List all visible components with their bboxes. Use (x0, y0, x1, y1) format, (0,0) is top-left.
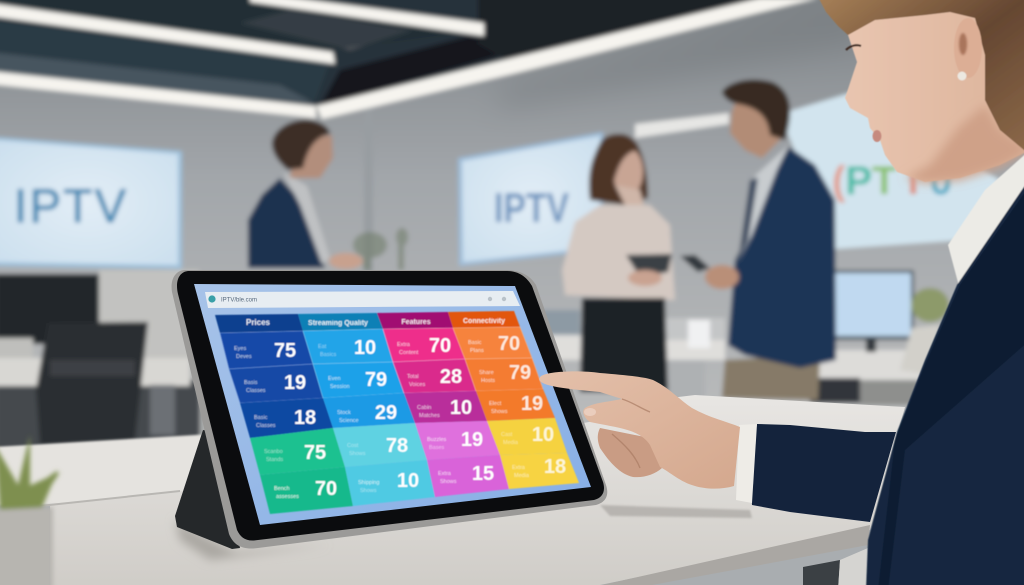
wall shadow below the strip (500, 5, 860, 110)
cell: streaming 10: Eat (318, 344, 327, 350)
cell: connectivity 19: Shows (491, 409, 508, 415)
cell: connectivity 79: Share (479, 370, 494, 376)
cell: features 10: Cabin (417, 405, 431, 411)
cell: yellow 10: Cast (501, 432, 513, 438)
cell: yellow 18 (500, 453, 579, 489)
cell: green 75 (250, 428, 345, 475)
blurred office background (0, 0, 1024, 460)
cell: price 75 (220, 331, 313, 369)
person: man right (705, 80, 836, 400)
cell: price 75: Deves (236, 354, 252, 360)
cell: green 70 (260, 467, 353, 514)
tablet stand (175, 430, 240, 549)
fingernail (584, 408, 596, 416)
cell: cyan 10: Shows (360, 488, 377, 494)
inner ear (959, 33, 967, 55)
cell: price 18 (240, 398, 333, 438)
wall screen left: IPTV (14, 179, 127, 232)
shirt cuff (736, 424, 757, 503)
ceiling light strips (0, 0, 818, 138)
tablet with comparison table (172, 270, 607, 549)
cell: connectivity 79 (465, 358, 543, 391)
wall screen left (0, 137, 182, 269)
cell: green 70: 70 (315, 478, 337, 500)
pot (0, 507, 53, 585)
wall screen centre: IPTV (494, 184, 569, 231)
cell: features 70 (383, 328, 465, 362)
hand (539, 371, 740, 489)
cell: streaming 10: Basics (320, 352, 336, 358)
cell: yellow 10 (487, 418, 567, 455)
cell: green 75: Scanbo (264, 449, 283, 455)
cell: connectivity 79: Hosts (481, 378, 495, 384)
cell: green 75: 75 (304, 442, 326, 464)
cell: streaming 79: 79 (365, 369, 387, 391)
cell: yellow 18: 18 (544, 456, 566, 478)
cell: violet 15 (427, 455, 509, 497)
cell: cyan 78: 78 (386, 435, 408, 457)
cell: connectivity 19 (476, 389, 555, 421)
wall corner (364, 105, 373, 435)
cell: violet 19: Buzzles (427, 437, 447, 443)
cell: connectivity 70 (453, 327, 532, 359)
address bar (205, 291, 520, 308)
cell: features 10: 10 (450, 397, 472, 419)
cell: streaming 79 (313, 362, 404, 398)
cell: yellow 18: Extra (512, 465, 526, 471)
neck shadow (905, 105, 1024, 183)
column header: Prices (215, 314, 303, 333)
finger shading (612, 399, 650, 468)
crease between tables (40, 490, 180, 507)
left desk (0, 338, 190, 435)
cell: cyan 78 (333, 423, 427, 467)
back room lower area (99, 270, 199, 360)
cell: streaming 29: 29 (375, 402, 397, 424)
presenter woman foreground (817, 0, 1024, 585)
cell: green 70: assesses (276, 494, 299, 500)
cell: connectivity 70: Plans (470, 348, 484, 354)
lips (872, 130, 882, 142)
cell: streaming 29: Science (339, 418, 359, 424)
cell: connectivity 70: 70 (498, 333, 520, 355)
curled fingers (598, 428, 662, 477)
right back monitor (827, 270, 914, 352)
tablet screen (194, 284, 591, 525)
cell: cyan 10: Shipping (358, 480, 379, 486)
plant and pot (0, 435, 60, 585)
comparison grid (215, 311, 579, 514)
cell: features 28: 28 (440, 366, 462, 388)
column header: Connectivity (448, 311, 520, 328)
eye (846, 45, 861, 50)
back table surface (0, 432, 250, 505)
face and neck (835, 0, 1024, 182)
table front edge (602, 525, 870, 585)
cell: violet 15: Shows (440, 479, 457, 485)
navy sleeve (750, 424, 896, 522)
office chair (36, 322, 148, 445)
cell: violet 19 (415, 421, 500, 460)
plant on back wall (353, 228, 408, 270)
cell: price 75: Eyes (234, 346, 246, 352)
cell: price 18: 18 (294, 407, 316, 429)
cell: streaming 29 (323, 393, 415, 428)
white collar (948, 150, 1024, 290)
cell: streaming 10: 10 (354, 337, 376, 359)
cell: price 18: Classes (256, 423, 276, 429)
cell: features 10: Matches (419, 413, 440, 419)
wall screen right (780, 93, 1000, 249)
cell: yellow 10: 10 (532, 424, 554, 446)
cell: connectivity 19: Elect (489, 401, 502, 407)
cell: price 75: 75 (274, 340, 296, 362)
cell: cyan 10: 10 (397, 470, 419, 492)
cell: features 28 (393, 359, 476, 393)
cell: features 70: Extra (397, 342, 411, 348)
cell: violet 15: 15 (472, 463, 494, 485)
hair (817, 0, 1024, 155)
address bar: IPTV/ble.com (221, 298, 257, 304)
cell: green 75: Stands (266, 457, 283, 463)
cell: violet 15: Extra (438, 471, 452, 477)
cell: cyan 78: Cost (347, 443, 359, 449)
cell: cyan 10 (345, 460, 435, 506)
column header: Features (377, 312, 453, 329)
pointing hand and sleeve (539, 371, 896, 522)
cell: features 70: Content (399, 350, 419, 356)
cell: price 19: Classes (246, 388, 266, 394)
table leg (803, 560, 840, 585)
cell: price 19: 19 (284, 372, 306, 394)
column header: Features: Features (401, 319, 431, 326)
cell: green 70: Bench (274, 486, 290, 492)
back wall (0, 0, 1024, 460)
cell: violet 19: Bases (429, 445, 445, 451)
cell: connectivity 70: Basic (468, 340, 482, 346)
cell: cyan 78: Shows (349, 451, 366, 457)
cell: violet 19: 19 (461, 429, 483, 451)
navy jacket (866, 178, 1024, 585)
plant leaves (0, 435, 60, 515)
column header: Streaming Quality: Streaming Quality (308, 320, 368, 327)
foreground table (40, 395, 905, 585)
cell: features 28: Total (407, 374, 419, 380)
cell: streaming 79: Session (330, 384, 350, 390)
wall screen right: (PT I 0 (832, 159, 952, 203)
column header: Streaming Quality (298, 313, 383, 331)
ear (954, 18, 982, 78)
cell: features 10 (404, 391, 487, 423)
person: woman centre (562, 134, 710, 392)
cell: yellow 18: Media (514, 473, 530, 479)
cell: price 18: Basic (254, 415, 268, 421)
ceiling (0, 0, 830, 112)
cell: yellow 10: Media (503, 440, 519, 446)
cell: price 19 (229, 364, 323, 403)
cell: streaming 79: Even (328, 376, 341, 382)
cell: streaming 29: Stock (337, 410, 351, 416)
cell: streaming 10 (303, 329, 393, 364)
cell: connectivity 19: 19 (521, 393, 543, 415)
cell: connectivity 79: 79 (509, 362, 531, 384)
cell: features 28: Voices (409, 382, 425, 388)
tablet body (172, 270, 607, 548)
cell: price 19: Basis (244, 380, 258, 386)
right back desks (540, 310, 935, 405)
dark monitor left (0, 274, 99, 344)
column header: Prices: Prices (246, 318, 271, 327)
wall screen centre (458, 132, 603, 266)
person: man left (248, 120, 363, 269)
earring (958, 72, 966, 80)
cell: features 70: 70 (429, 335, 451, 357)
green plant right (900, 288, 949, 375)
table shadow (600, 505, 752, 518)
column header: Connectivity: Connectivity (463, 318, 505, 325)
